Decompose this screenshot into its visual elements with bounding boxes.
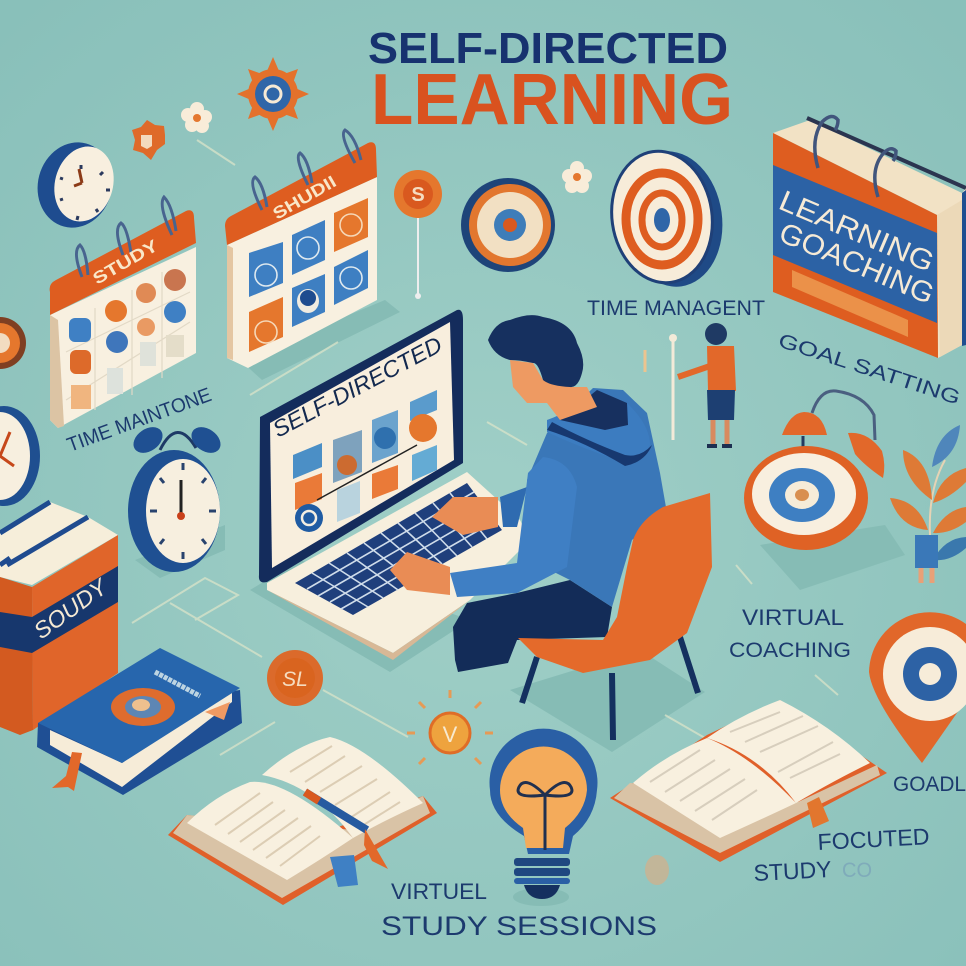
- title: [368, 24, 733, 140]
- label: time management: TIME MANAGENT: [587, 297, 765, 320]
- book: learning coaching: LEARNING: [774, 185, 939, 279]
- laptop: SELF-DIRECTED: [268, 331, 446, 442]
- label: virtual coaching: [729, 605, 851, 662]
- icon: faint leaf: [645, 855, 669, 885]
- icon: flower: [181, 102, 212, 133]
- figure: small standing person: [645, 323, 736, 446]
- label: focused study: [753, 823, 930, 886]
- icon: sun badge: [407, 690, 493, 764]
- label: virtual study sessions: VIRTUEL: [391, 879, 487, 904]
- calendar: right study: SHUDII: [270, 172, 340, 223]
- icon: small orange badge: [132, 120, 165, 160]
- alarm clock: left: [128, 422, 225, 572]
- icon: wall clock: [28, 134, 122, 236]
- plant: [890, 425, 966, 583]
- hood: [547, 390, 650, 462]
- book: closed blue: [37, 648, 242, 795]
- book: learning coaching: GOACHING: [774, 217, 939, 311]
- icon: gear badge: [237, 57, 309, 131]
- label: focused study: STUDY: [753, 856, 832, 886]
- label: focused study: FOCUTED: [817, 823, 930, 855]
- icon: location pin: [869, 612, 966, 763]
- icon: light bulb: [490, 729, 598, 906]
- label: virtual coaching: COACHING: [729, 639, 851, 662]
- neck collar: [560, 390, 628, 430]
- label: virtual study sessions: STUDY SESSIONS: [381, 911, 657, 941]
- calendar icons: [69, 269, 186, 409]
- legs: [453, 580, 612, 672]
- books: stack left: SOUDY: [29, 573, 113, 644]
- calendar: right study: [225, 130, 377, 368]
- label: time maintone: TIME MAINTONE: [64, 384, 215, 457]
- icon: left edge coin: [0, 317, 26, 369]
- chair legs: [522, 637, 698, 740]
- chair seat and back: [518, 493, 712, 673]
- icon: sun badge: V: [443, 722, 458, 747]
- clock: left edge: [0, 406, 40, 506]
- far arm: [500, 487, 527, 527]
- title: LEARNING: [371, 60, 733, 140]
- open book: center right: [610, 700, 887, 862]
- laptop: [259, 310, 530, 660]
- label: goadl: GOADL: [893, 773, 966, 796]
- head: [510, 360, 597, 420]
- icon: compass target: [461, 178, 555, 272]
- icon: orange coin: [394, 170, 442, 299]
- figure: student at laptop: [390, 315, 712, 740]
- far hand: [432, 497, 498, 535]
- torso hoodie: [527, 388, 667, 607]
- label: virtual coaching: VIRTUAL: [742, 605, 844, 630]
- icon: coin SL: SL: [282, 668, 308, 691]
- ground shadows: [135, 300, 905, 752]
- icon: dartboard target: [603, 145, 731, 293]
- label: virtual study sessions: [381, 879, 657, 941]
- calendar: left study: [50, 197, 196, 428]
- icon: orange coin: S: [411, 184, 425, 206]
- label: focused study: CO: [842, 859, 872, 882]
- calendar tiles: [249, 198, 368, 352]
- books: stack left: [0, 502, 118, 735]
- alarm clock: right: [744, 391, 884, 550]
- decorative guide lines: [132, 140, 838, 755]
- title: SELF-DIRECTED: [368, 24, 728, 73]
- near hand: [390, 552, 450, 595]
- calendar: left study: STUDY: [90, 236, 162, 288]
- book: learning coaching: [773, 116, 966, 358]
- screen tiles: [293, 390, 437, 532]
- open book: center left: [168, 737, 437, 905]
- near arm: [450, 457, 577, 597]
- hair: [488, 315, 583, 387]
- icon: coin SL: [267, 650, 323, 706]
- icon: flower small: [562, 161, 592, 193]
- label: goal setting: GOAL SATTING: [775, 330, 963, 409]
